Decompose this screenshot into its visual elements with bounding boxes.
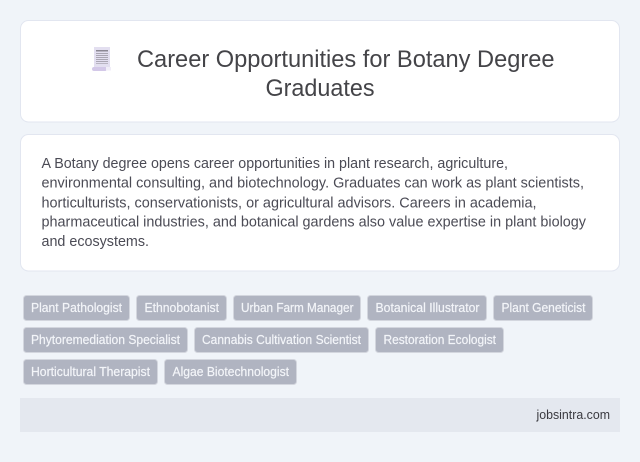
tag: Restoration Ecologist: Restoration Ecologist [384, 333, 496, 347]
tag: Cannabis Cultivation Scientist: Cannabis Cultivation Scientist [202, 333, 361, 347]
title [137, 46, 554, 102]
description text [42, 156, 587, 250]
tag: Algae Biotechnologist: Algae Biotechnologist [172, 365, 289, 379]
icon: paper scroll [92, 47, 111, 71]
tag: Ethnobotanist [136, 296, 226, 320]
tag: Phytoremediation Specialist [24, 328, 188, 352]
title: Graduates [266, 75, 374, 102]
tag: Botanical Illustrator [368, 296, 486, 320]
tag: Plant Geneticist: Plant Geneticist [502, 301, 586, 315]
tag: Algae Biotechnologist [164, 360, 296, 384]
footer [20, 398, 620, 432]
title: Career Opportunities for Botany Degree [137, 46, 554, 73]
career tags [24, 296, 592, 384]
description text: and ecosystems. [42, 234, 149, 250]
tag: Phytoremediation Specialist: Phytoremediation Specialist [31, 333, 181, 347]
tag: Horticultural Therapist: Horticultural Therapist [31, 365, 151, 379]
tag: Plant Geneticist [494, 296, 592, 320]
tag: Restoration Ecologist [376, 328, 504, 352]
description text: pharmaceutical industries, and botanical gardens also value expertise in plant biology [42, 214, 587, 230]
tag: Urban Farm Manager [234, 296, 360, 320]
description text: A Botany degree opens career opportunities in plant research, agriculture, [42, 156, 508, 172]
footer source text: jobsintra.com [536, 408, 610, 422]
tag: Plant Pathologist: Plant Pathologist [31, 301, 123, 315]
tag: Plant Pathologist [24, 296, 130, 320]
tag: Cannabis Cultivation Scientist [194, 328, 368, 352]
panel: header [20, 20, 620, 122]
description text: horticulturists, conservationists, or agricultural advisors. Careers in academia, [42, 196, 536, 212]
description text: environmental consulting, and biotechnology. Graduates can work as plant scientists, [42, 176, 584, 192]
tag: Horticultural Therapist [24, 360, 158, 384]
tag: Ethnobotanist: Ethnobotanist [144, 301, 220, 315]
tag: Botanical Illustrator: Botanical Illustrator [376, 301, 480, 315]
tag: Urban Farm Manager: Urban Farm Manager [241, 301, 354, 315]
panel: description [20, 134, 620, 271]
